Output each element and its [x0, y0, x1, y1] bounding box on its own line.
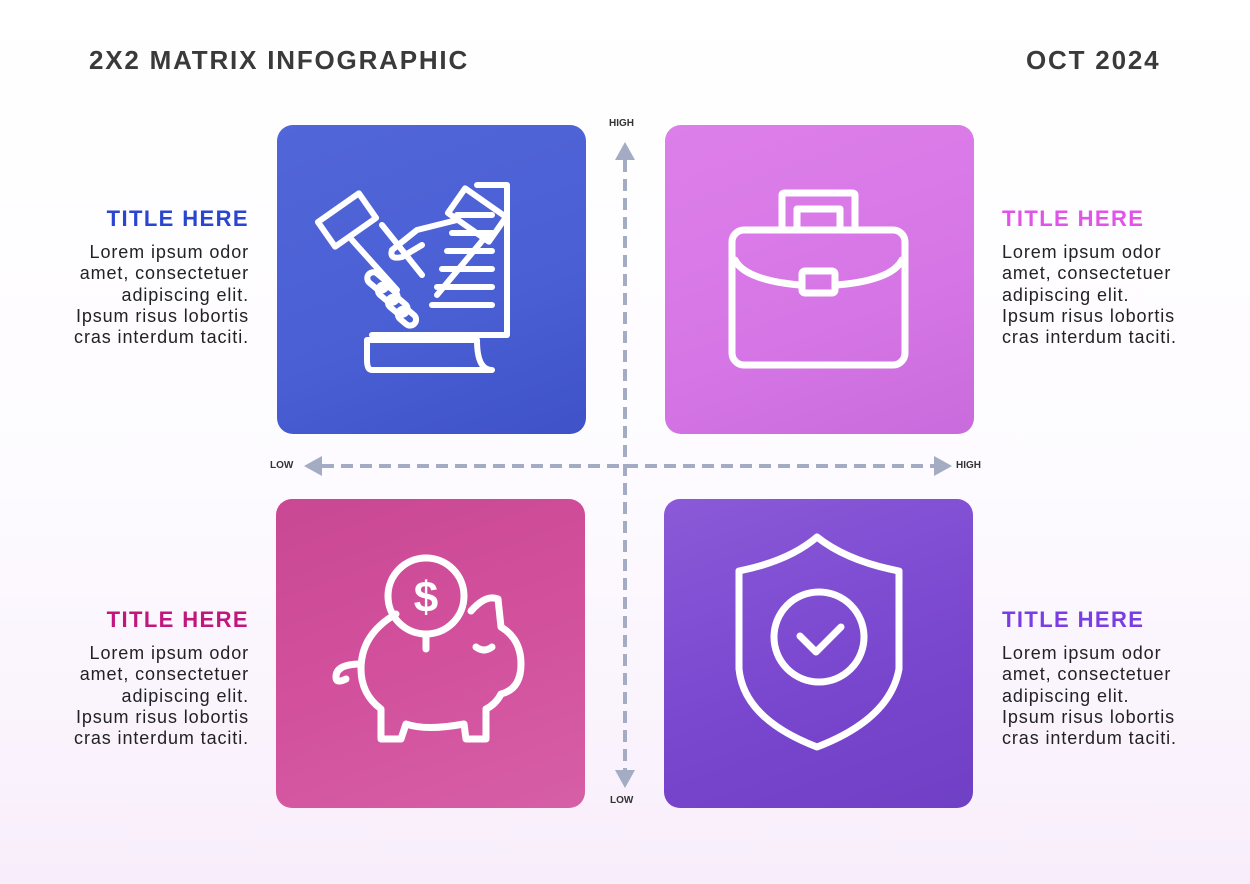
axis label: high right: HIGH	[956, 460, 981, 471]
text block: bottom-left: cras interdum taciti.	[74, 728, 249, 748]
text block: top-right: Ipsum risus lobortis	[1002, 306, 1175, 326]
text block: top-left: Lorem ipsum odor	[90, 242, 249, 262]
text block: bottom-right: adipiscing elit.	[1002, 686, 1129, 706]
panel: top-left handshake	[277, 125, 586, 434]
icon: piggy bank: $	[414, 573, 438, 622]
text block: top-right: cras interdum taciti.	[1002, 327, 1177, 347]
text block: top-right	[1002, 206, 1177, 347]
text block: bottom-left: amet, consectetuer	[80, 664, 249, 684]
icon: shield	[739, 537, 899, 747]
text block: top-right: Lorem ipsum odor	[1002, 242, 1161, 262]
text block: top-right: adipiscing elit.	[1002, 285, 1129, 305]
text block: bottom-left: Ipsum risus lobortis	[76, 707, 249, 727]
axis label: high top: HIGH	[609, 118, 634, 129]
title: 2X2 MATRIX INFOGRAPHIC	[89, 45, 469, 75]
text block: bottom-left: Lorem ipsum odor	[90, 643, 249, 663]
panel: bottom-right shield	[664, 499, 973, 808]
text block: bottom-right: Lorem ipsum odor	[1002, 643, 1161, 663]
text block: top-left: adipiscing elit.	[122, 285, 249, 305]
axis label: low bottom: LOW	[610, 795, 633, 806]
icon: briefcase	[732, 193, 905, 365]
text block: bottom-right: amet, consectetuer	[1002, 664, 1171, 684]
text block: top-left: amet, consectetuer	[80, 263, 249, 283]
text block: bottom-right	[1002, 607, 1177, 748]
icon: piggy bank	[336, 558, 521, 739]
text block: top-left: TITLE HERE	[107, 206, 249, 231]
text block: bottom-right: TITLE HERE	[1002, 607, 1144, 632]
icon: handshake	[318, 185, 507, 370]
text block: top-right: amet, consectetuer	[1002, 263, 1171, 283]
date: OCT 2024	[1026, 45, 1160, 75]
text block: top-left: Ipsum risus lobortis	[76, 306, 249, 326]
text block: bottom-left: adipiscing elit.	[122, 686, 249, 706]
text block: top-left: cras interdum taciti.	[74, 327, 249, 347]
panel: top-right briefcase	[665, 125, 974, 434]
panel: bottom-left piggy bank	[276, 499, 585, 808]
text block: bottom-left: TITLE HERE	[107, 607, 249, 632]
text block: bottom-right: cras interdum taciti.	[1002, 728, 1177, 748]
text block: top-left	[74, 206, 249, 347]
text block: bottom-left	[74, 607, 249, 748]
text block: top-right: TITLE HERE	[1002, 206, 1144, 231]
axis label: low left: LOW	[270, 460, 293, 471]
text block: bottom-right: Ipsum risus lobortis	[1002, 707, 1175, 727]
